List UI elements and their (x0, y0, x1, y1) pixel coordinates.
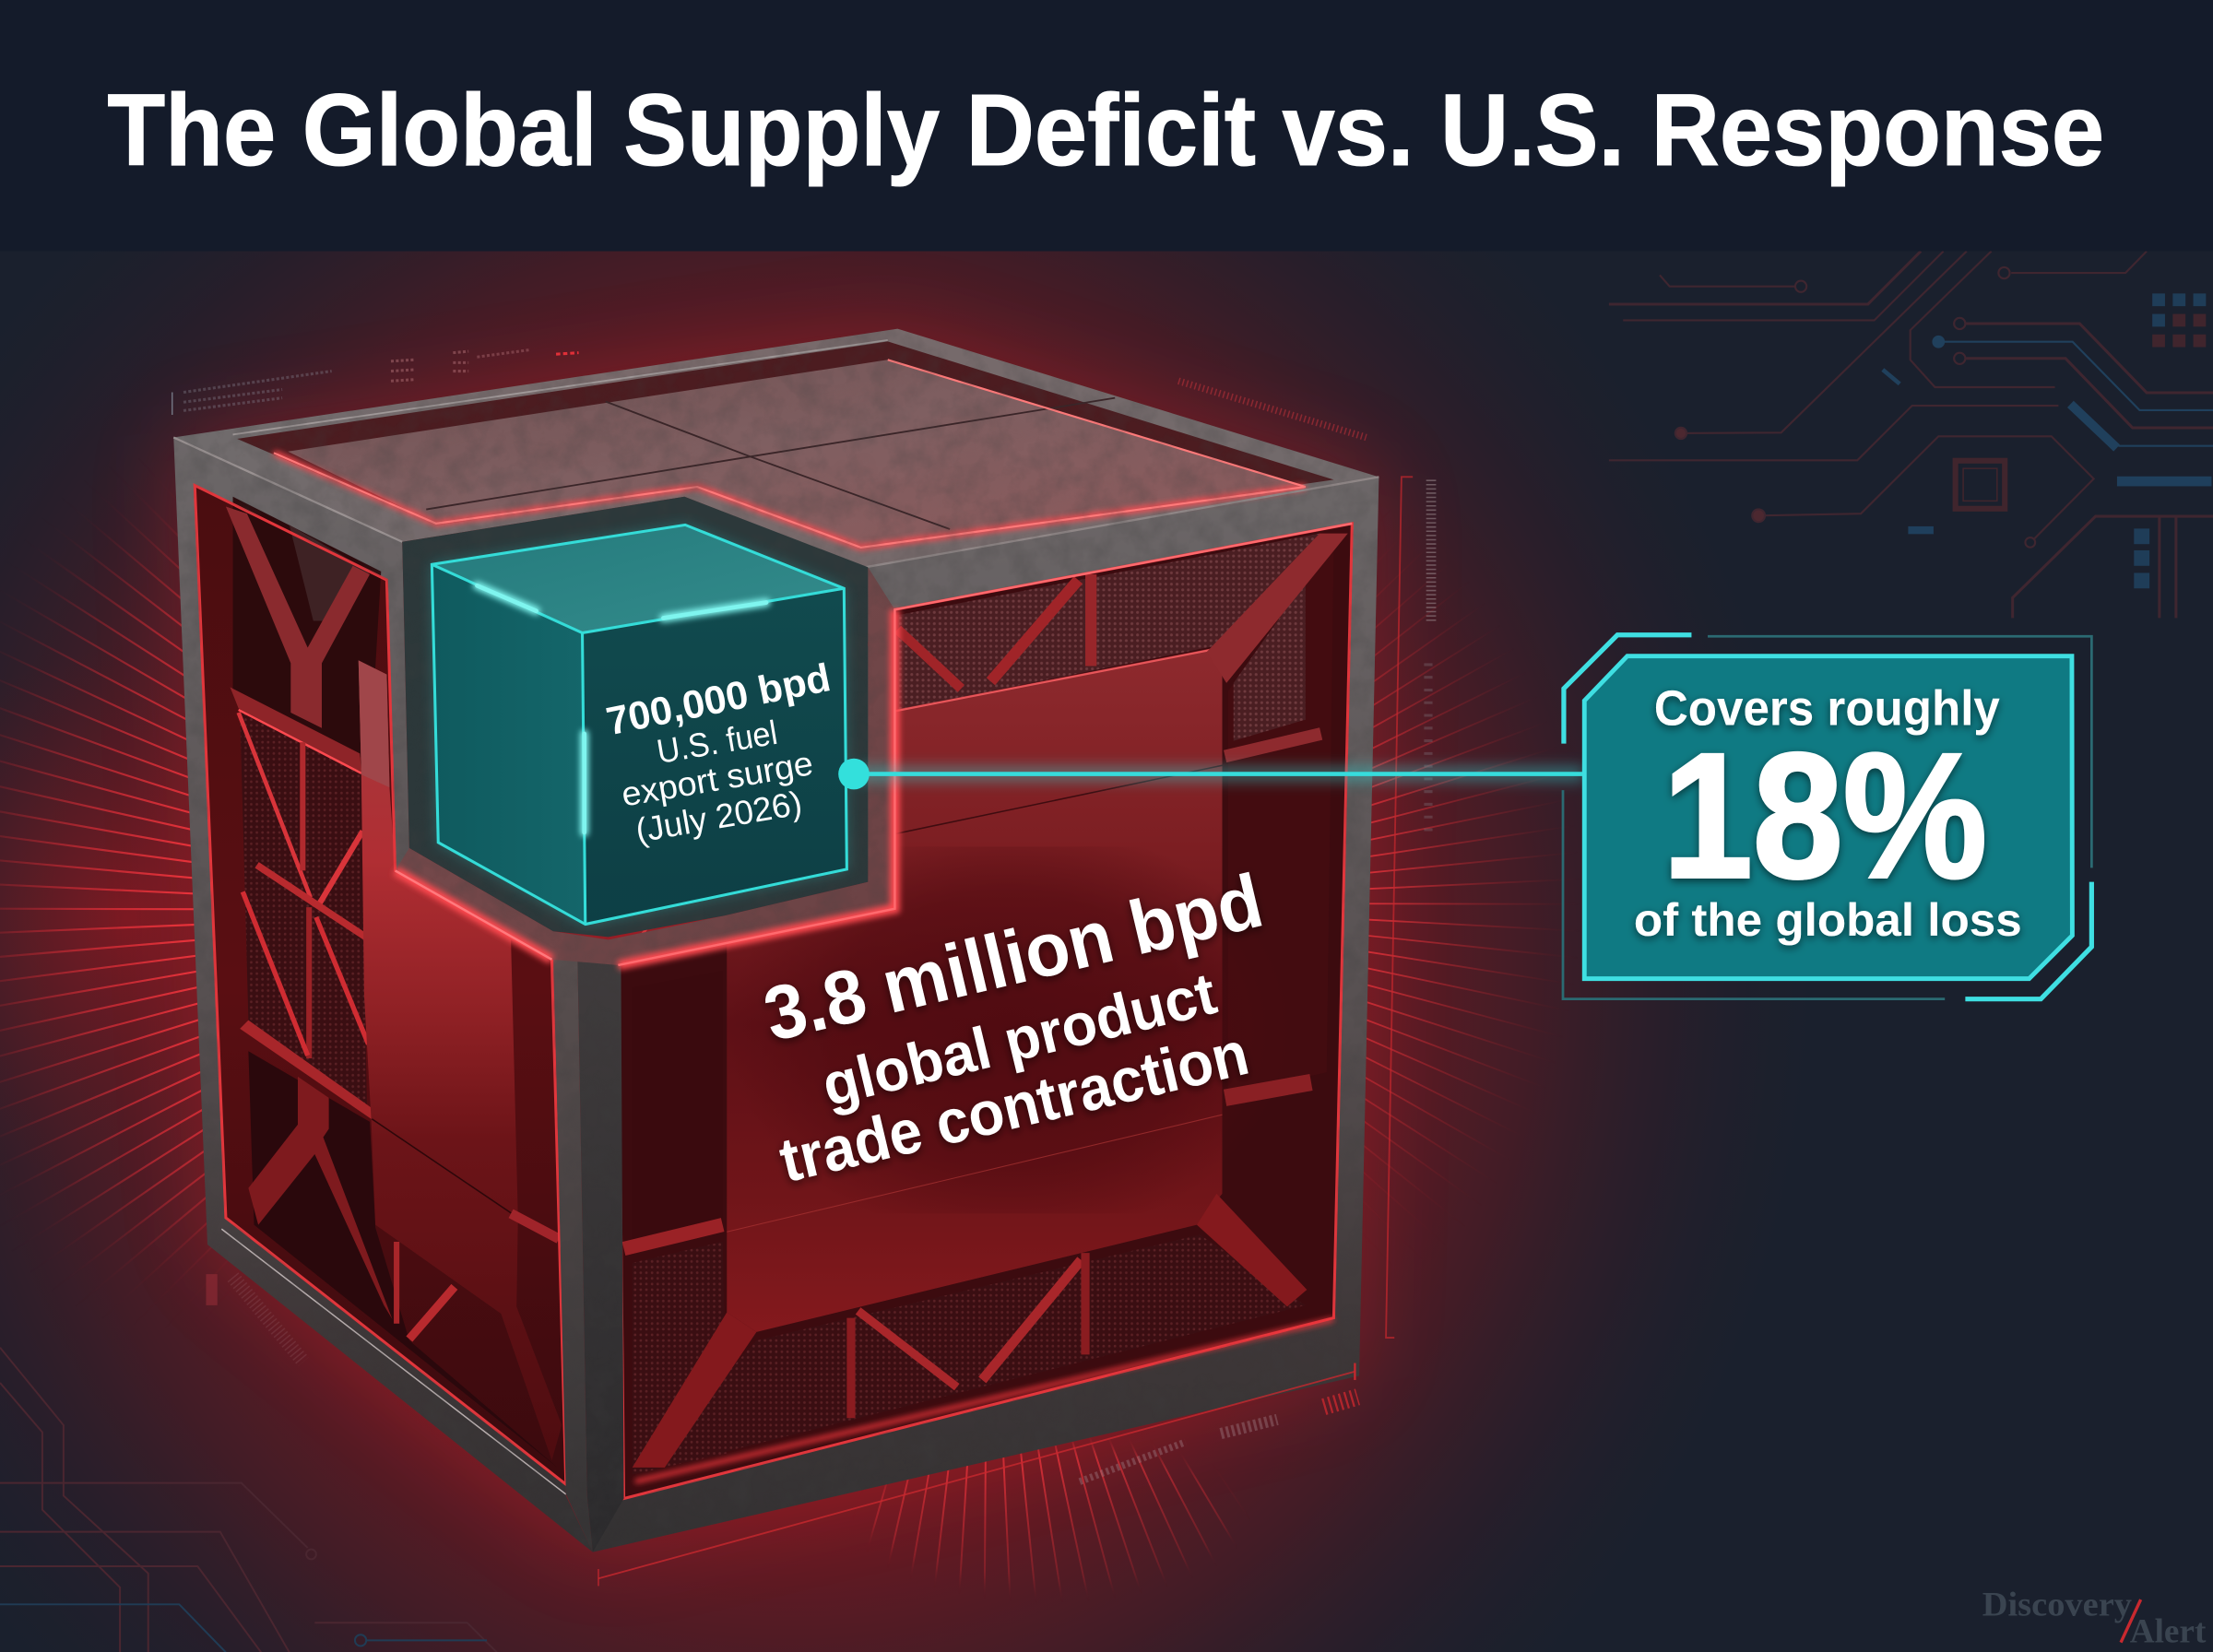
red cube label (756, 857, 1271, 1196)
large red cube: global contraction (170, 324, 1383, 1559)
right-face central plate (727, 648, 1223, 1332)
teal cube: U.S. export surge (432, 525, 846, 925)
teal cube label: export surge (619, 744, 816, 813)
dimension lines and technical marks (172, 350, 1431, 1586)
left-face cross bars (230, 687, 361, 773)
watermark logo: Alert (2130, 1612, 2207, 1650)
cube halo glow (173, 329, 1379, 1552)
red cube label: trade contraction (774, 1019, 1255, 1196)
teal cube left face (432, 564, 586, 925)
callout text: Covers roughly (1654, 682, 2000, 737)
title: The Global Supply Deficit vs. U.S. Response (107, 74, 2104, 187)
neon red notch outline (396, 524, 1352, 965)
connector line (838, 759, 1583, 789)
header band (0, 0, 2213, 251)
teal cube label: 700,000 bpd (603, 655, 834, 744)
callout text (1634, 682, 2022, 946)
callout: covers roughly 18% (1563, 635, 2091, 999)
front vertical edge (553, 931, 624, 1552)
cube left face (173, 437, 593, 1552)
radial red light rays (85, 444, 1474, 1552)
teal cube label: (July 2026) (633, 784, 805, 850)
red cube label: 3.8 million bpd (756, 857, 1271, 1057)
left-face lower A brace (248, 1077, 393, 1319)
callout text: 18% (1663, 715, 1987, 914)
cube right face (593, 477, 1379, 1552)
teal cube label: U.S. fuel (654, 714, 780, 771)
watermark logo (1982, 1586, 2207, 1650)
callout panel (1584, 656, 2072, 979)
cube top face (173, 329, 1379, 567)
teal cube top face (432, 525, 844, 632)
metal band around notch (396, 567, 894, 965)
callout bracket frame (1563, 635, 2091, 999)
circuit traces: top right (1609, 251, 2213, 618)
recessed notch frame (402, 497, 868, 937)
callout text: of the global loss (1634, 893, 2022, 946)
left-face lattice (239, 713, 455, 1339)
left-face Y brace (226, 506, 370, 728)
left-face central plate (359, 660, 562, 1460)
teal cube right face (583, 588, 846, 925)
right-face struts (624, 574, 1321, 1418)
red cube label: global product (816, 960, 1223, 1119)
teal cube label (603, 655, 834, 850)
circuit traces: bottom left (0, 1348, 497, 1652)
glowing teal edges (477, 585, 766, 832)
metal texture overlay (170, 324, 1383, 1559)
watermark logo: Discovery (1982, 1586, 2132, 1623)
